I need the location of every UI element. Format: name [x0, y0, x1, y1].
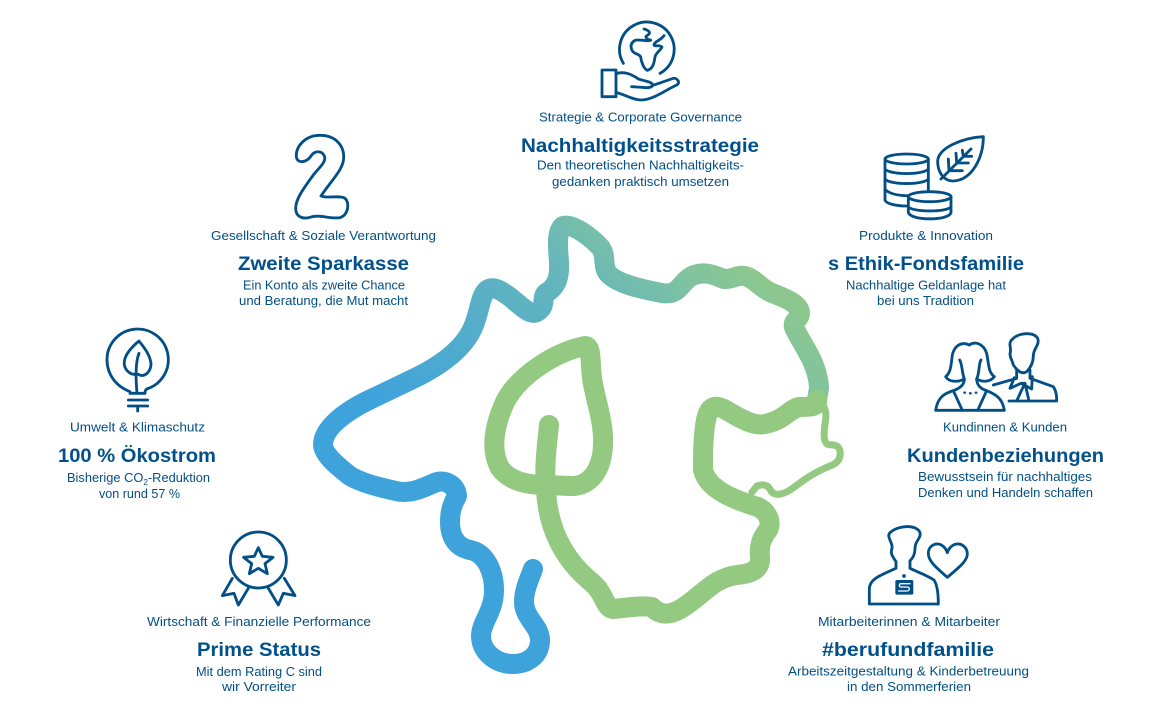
- category label: Gesellschaft & Soziale Verantwortung: [211, 229, 436, 243]
- block: Oekostrom: von rund 57 %: [99, 487, 180, 501]
- icon: number two: [296, 135, 348, 218]
- heading: Kundenbeziehungen: [907, 446, 1104, 467]
- category label: Kundinnen & Kunden: [943, 420, 1067, 434]
- heading: Prime Status: [197, 640, 321, 661]
- heading: Zweite Sparkasse: [238, 254, 409, 275]
- icon: light bulb with leaf: [107, 329, 168, 411]
- block: Nachhaltigkeitsstrategie: [521, 22, 759, 189]
- heading: 100 % Ökostrom: [58, 446, 216, 467]
- description: Den theoretischen Nachhaltigkeits-: [537, 158, 744, 172]
- block: Nachhaltigkeitsstrategie: gedanken praktisch umsetzen: [552, 175, 729, 189]
- block: s Ethik-Fondsfamilie: [828, 137, 1024, 308]
- block: Kundenbeziehungen: Denken und Handeln schaffen: [918, 486, 1093, 500]
- description: Ein Konto als zweite Chance: [243, 278, 405, 292]
- description: 2: [143, 478, 148, 487]
- block: Zweite Sparkasse: und Beratung, die Mut macht: [239, 294, 409, 308]
- heading: #berufundfamilie: [822, 640, 994, 661]
- heading: s Ethik-Fondsfamilie: [828, 254, 1024, 275]
- icon: award medal: [222, 532, 295, 605]
- thin coastline strand: [752, 405, 840, 494]
- block: Oekostrom: [58, 329, 216, 501]
- map outline: blue to green section: [323, 226, 819, 664]
- description: Arbeitszeitgestaltung & Kinderbetreuung: [788, 664, 1029, 678]
- description: Mit dem Rating C sind: [196, 665, 322, 679]
- icon: employee with heart: [869, 527, 967, 604]
- description: Bisherige CO: [67, 471, 141, 485]
- map of the region: [323, 226, 840, 664]
- block: Prime Status: [147, 532, 371, 694]
- description: Nachhaltige Geldanlage hat: [846, 278, 1007, 292]
- category label: Produkte & Innovation: [859, 229, 993, 243]
- leaf outline: [494, 346, 603, 486]
- block: berufundfamilie: [788, 527, 1029, 694]
- block: Prime Status: wir Vorreiter: [221, 680, 296, 694]
- icon: coins and leaf: [885, 137, 983, 219]
- icon: woman and man: [936, 334, 1057, 410]
- icon: hand holding globe: [602, 22, 679, 100]
- category label: Mitarbeiterinnen & Mitarbeiter: [818, 615, 1000, 629]
- block: berufundfamilie: in den Sommerferien: [847, 680, 971, 694]
- heading: Nachhaltigkeitsstrategie: [521, 136, 759, 157]
- description: -Reduktion: [148, 471, 210, 485]
- category label: Umwelt & Klimaschutz: [70, 420, 205, 434]
- map outline: green section and leaf stem: [545, 400, 817, 614]
- category label: Strategie & Corporate Governance: [539, 110, 742, 124]
- block: Kundenbeziehungen: [907, 334, 1104, 500]
- category label: Wirtschaft & Finanzielle Performance: [147, 615, 371, 629]
- block: s Ethik-Fondsfamilie: bei uns Tradition: [877, 294, 974, 308]
- description: Bewusstsein für nachhaltiges: [918, 470, 1092, 484]
- block: Zweite Sparkasse: [211, 135, 436, 308]
